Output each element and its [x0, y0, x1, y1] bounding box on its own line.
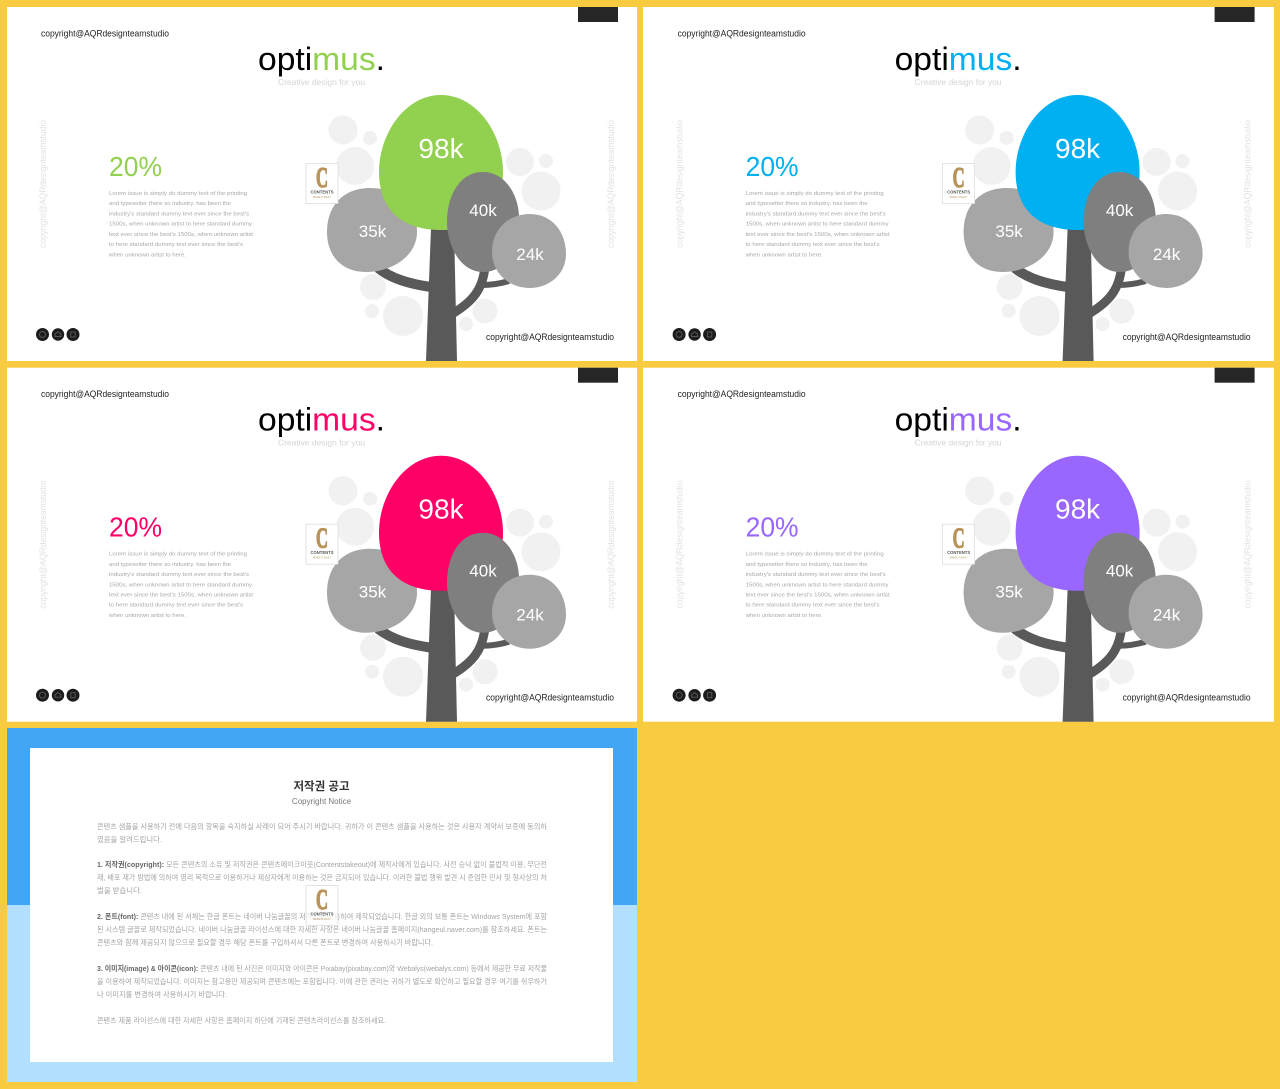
body text: and typesetter there so industry. has been the	[109, 562, 231, 568]
copyright bottom right: copyright@AQRdesignteamstudio	[486, 693, 614, 703]
subtitle: Creative design for you	[915, 77, 1002, 87]
body text: Lorem issue is simply do dummy text of the printing	[109, 191, 247, 197]
blob: 40k	[1084, 172, 1156, 272]
blob: 35k	[327, 188, 417, 272]
blob: 24k: 24k	[516, 245, 544, 264]
blob: 24k	[492, 575, 566, 649]
logo badge: CONTENTS	[310, 912, 334, 916]
subtitle: Creative design for you	[278, 77, 365, 87]
copyright top left: copyright@AQRdesignteamstudio	[678, 28, 806, 38]
body text: industry's standard dummy text ever since the best's	[109, 211, 249, 217]
body text: Lorem issue is simply do dummy text of the printing	[746, 552, 884, 558]
blob: 40k	[447, 172, 519, 272]
body text: industry's standard dummy text ever since the best's	[746, 572, 886, 578]
tree trunk and branches	[378, 589, 509, 722]
notice section 2: 2. 폰트(font): 콘텐츠 내에 된 서체는 한글 폰트는 네이버 나눔글꼴의 저작물을 사용하여 제작되었습니다. 한글 외의 보통 폰트는 Windows System에 포함	[97, 911, 547, 921]
body text: to here standard dummy text ever since the best's	[109, 242, 243, 248]
body text: and typesetter there so industry. has been the	[746, 562, 868, 568]
notice section 2: 된 시스템 글꼴로 제작되었습니다. 네이버 나눔글꼴 라이선스에 대한 자세한 사항은 네이버 나눔글꼴 홈페이지(hangeul.naver.com)를 참조하세요. 폰트는	[97, 924, 547, 934]
icon row	[36, 689, 80, 702]
body text: 1500s, when unknown artist to here standard dummy	[109, 582, 252, 588]
notice section 1	[97, 859, 547, 895]
blob: 35k	[327, 549, 417, 633]
vertical copyright right: copyright@AQRdesignteamstudio	[606, 120, 616, 248]
logo badge: MAKE IT EASY	[950, 195, 968, 199]
vertical copyright right: copyright@AQRdesignteamstudio	[1243, 120, 1253, 248]
logo badge	[306, 523, 338, 564]
body text	[744, 552, 890, 619]
blob: 24k	[1129, 214, 1203, 288]
copyright bottom right: copyright@AQRdesignteamstudio	[486, 332, 614, 342]
blob: 98k	[1016, 95, 1140, 230]
title: optimus: optimus.	[258, 41, 385, 77]
logo badge: C	[953, 162, 965, 194]
blob: 35k: 35k	[359, 583, 387, 602]
blob: 98k	[1016, 456, 1140, 591]
body text: industry's standard dummy text ever since the best's	[746, 211, 886, 217]
tab: black corner rectangle	[578, 7, 618, 22]
tab: black corner rectangle	[578, 368, 618, 383]
stat: 20%: 20%	[109, 151, 162, 182]
notice intro	[97, 821, 547, 844]
panel: purple tree slide	[643, 368, 1274, 722]
logo badge: MAKE IT EASY	[950, 556, 968, 560]
tree trunk and branches	[1015, 228, 1146, 361]
blob: 98k: 98k	[418, 133, 465, 164]
blob: 40k: 40k	[1106, 201, 1134, 220]
notice section 3: 을 이용하여 제작되었습니다. 이미지는 참고용만 제공되며 콘텐츠에는 포함됩니다. 이에 관한 권리는 귀하가 별도로 확인하고 필요할 경우 여기를 쉬우하거	[97, 976, 547, 986]
title: optimus: optimus.	[895, 402, 1022, 438]
body text: when unknown artist to here.	[108, 252, 186, 258]
blob: 40k: 40k	[469, 201, 497, 220]
panel: green tree slide	[7, 7, 637, 361]
blob: 40k	[447, 533, 519, 633]
copyright top left: copyright@AQRdesignteamstudio	[678, 389, 806, 399]
blob: 35k: 35k	[995, 222, 1023, 241]
body text: industry's standard dummy text ever since the best's	[109, 572, 249, 578]
notice section 3: 3. 이미지(image) & 아이콘(icon): 콘텐츠 내에 된 사진은 이미지와 아이콘은 Pixabay(pixabay.com)와 Webalys(webalys.com) 등에서 제공한 무료 저작물	[97, 963, 547, 973]
copyright top left: copyright@AQRdesignteamstudio	[41, 28, 169, 38]
notice subheading: Copyright Notice	[292, 797, 352, 806]
background bubbles	[328, 116, 560, 336]
blob: 24k: 24k	[1153, 606, 1181, 625]
blob: 24k	[1129, 575, 1203, 649]
copyright top left: copyright@AQRdesignteamstudio	[41, 389, 169, 399]
body text: when unknown artist to here.	[108, 613, 186, 619]
vertical copyright left: copyright@AQRdesignteamstudio	[675, 481, 685, 609]
logo badge: MAKE IT EASY	[313, 556, 331, 560]
stat: 20%: 20%	[746, 512, 799, 543]
icon row	[673, 328, 716, 341]
blob: 24k: 24k	[516, 606, 544, 625]
logo badge: CONTENTS	[310, 190, 334, 194]
body text: Lorem issue is simply do dummy text of the printing	[109, 552, 247, 558]
body text: to here standard dummy text ever since the best's	[109, 603, 243, 609]
title: optimus: optimus.	[258, 402, 385, 438]
background bubbles	[965, 116, 1197, 336]
notice section 3: 나 이미지를 변경하여 사용하시기 바랍니다.	[97, 989, 227, 999]
notice section 1: 재, 배포 재가 방법에 의하여 영리 목적으로 이용하거나 제삼자에게 이용하는 것은 금지되어 있습니다. 이러한 불법 행위 발견 시 준엄한 민사 및 형사상의 처	[97, 872, 547, 882]
logo badge: CONTENTS	[947, 550, 970, 555]
blob: 98k	[379, 95, 503, 230]
body text: 1500s, when unknown artist to here standard dummy	[109, 222, 252, 228]
logo badge: C	[953, 523, 965, 555]
copyright bottom right: copyright@AQRdesignteamstudio	[1123, 332, 1251, 342]
logo badge	[943, 523, 975, 564]
blob: 35k	[964, 549, 1054, 633]
notice intro: 콘텐츠 샘플을 사용하기 전에 다음의 항목을 숙지하실 사례이 되어 주시기 바랍니다. 귀하가 이 콘텐츠 샘플을 사용하는 것은 사용자 계약서 보증에 동의하	[97, 821, 547, 831]
title: optimus: optimus.	[895, 41, 1022, 77]
logo badge	[943, 162, 975, 204]
notice heading: 저작권 공고	[293, 779, 350, 793]
icon row	[36, 328, 80, 341]
body text: text ever since the best's 1500s, when unknown artist	[109, 593, 254, 599]
stat: 20%: 20%	[746, 151, 799, 182]
blob: 98k: 98k	[1055, 494, 1101, 525]
notice section 2	[97, 911, 547, 947]
logo badge	[306, 162, 338, 204]
notice section 1: 벌을 받습니다.	[97, 885, 142, 895]
body text: text ever since the best's 1500s, when unknown artist	[746, 593, 890, 599]
panel: blue tree slide	[643, 7, 1274, 361]
body text: 1500s, when unknown artist to here standard dummy	[746, 582, 889, 588]
blob: 24k: 24k	[1153, 245, 1181, 264]
panel: pink tree slide	[7, 368, 637, 722]
stat: 20%: 20%	[109, 512, 162, 543]
subtitle: Creative design for you	[278, 438, 365, 448]
body text	[108, 552, 254, 619]
blob: 24k	[492, 214, 566, 288]
blob: 98k: 98k	[1055, 133, 1101, 164]
body text: to here standard dummy text ever since the best's	[746, 603, 880, 609]
vertical copyright right: copyright@AQRdesignteamstudio	[606, 481, 616, 609]
blob: 40k	[1084, 533, 1156, 633]
vertical copyright left: copyright@AQRdesignteamstudio	[38, 120, 48, 248]
logo badge: CONTENTS	[947, 190, 970, 194]
blob: 40k: 40k	[469, 562, 497, 581]
tab: black corner rectangle	[1215, 368, 1255, 383]
tree trunk and branches	[378, 228, 509, 361]
panel: copyright notice	[7, 728, 637, 1082]
vertical copyright right: copyright@AQRdesignteamstudio	[1243, 481, 1253, 609]
body text: and typesetter there so industry. has been the	[109, 201, 231, 207]
vertical copyright left: copyright@AQRdesignteamstudio	[675, 120, 685, 248]
logo badge: C	[316, 523, 328, 555]
blob: 35k	[964, 188, 1054, 272]
tab: black corner rectangle	[1215, 7, 1255, 22]
notice section 2: 콘텐츠와 함께 제공되지 않으므로 필요할 경우 해당 폰트를 구입하셔서 다른 폰트로 변경하여 사용하시기 바랍니다.	[97, 937, 433, 947]
body text	[108, 191, 254, 258]
background bubbles	[965, 476, 1197, 697]
notice intro: 였음을 알려드립니다.	[97, 834, 162, 844]
background bubbles	[328, 476, 560, 697]
blob: 40k: 40k	[1106, 562, 1134, 581]
logo badge: C	[316, 162, 328, 194]
subtitle: Creative design for you	[915, 438, 1002, 448]
logo badge: MAKE IT EASY	[313, 195, 331, 199]
logo badge: MAKE IT EASY	[313, 917, 331, 921]
copyright bottom right: copyright@AQRdesignteamstudio	[1123, 693, 1251, 703]
body text: Lorem issue is simply do dummy text of the printing	[746, 191, 884, 197]
body text: text ever since the best's 1500s, when unknown artist	[109, 232, 254, 238]
blob: 35k: 35k	[995, 583, 1023, 602]
body text	[744, 191, 890, 258]
blob: 98k	[379, 456, 503, 591]
body text: text ever since the best's 1500s, when unknown artist	[746, 232, 890, 238]
logo badge: CONTENTS	[310, 550, 334, 555]
blob: 98k: 98k	[418, 494, 465, 525]
body text: when unknown artist to here.	[744, 613, 823, 619]
tree trunk and branches	[1015, 589, 1146, 722]
logo badge	[306, 884, 338, 926]
notice section 3	[97, 963, 547, 999]
body text: 1500s, when unknown artist to here standard dummy	[746, 222, 889, 228]
body text: and typesetter there so industry. has been the	[746, 201, 868, 207]
logo badge: C	[316, 884, 328, 916]
vertical copyright left: copyright@AQRdesignteamstudio	[38, 481, 48, 609]
body text: to here standard dummy text ever since the best's	[746, 242, 880, 248]
notice section 1: 1. 저작권(copyright): 모든 콘텐츠의 소유 및 저작권은 콘텐츠메이크아웃(Contentstakeout)에 제작사에게 있습니다. 사전 승낙 없이 불법적 이용, 무단전	[97, 859, 547, 869]
blob: 35k: 35k	[359, 222, 387, 241]
notice closing line: 콘텐츠 제품 라이선스에 대한 자세한 사항은 홈페이지 하단에 기재된 콘텐츠라이선스를 참조하세요.	[97, 1015, 386, 1025]
body text: when unknown artist to here.	[744, 252, 823, 258]
icon row	[673, 689, 716, 702]
